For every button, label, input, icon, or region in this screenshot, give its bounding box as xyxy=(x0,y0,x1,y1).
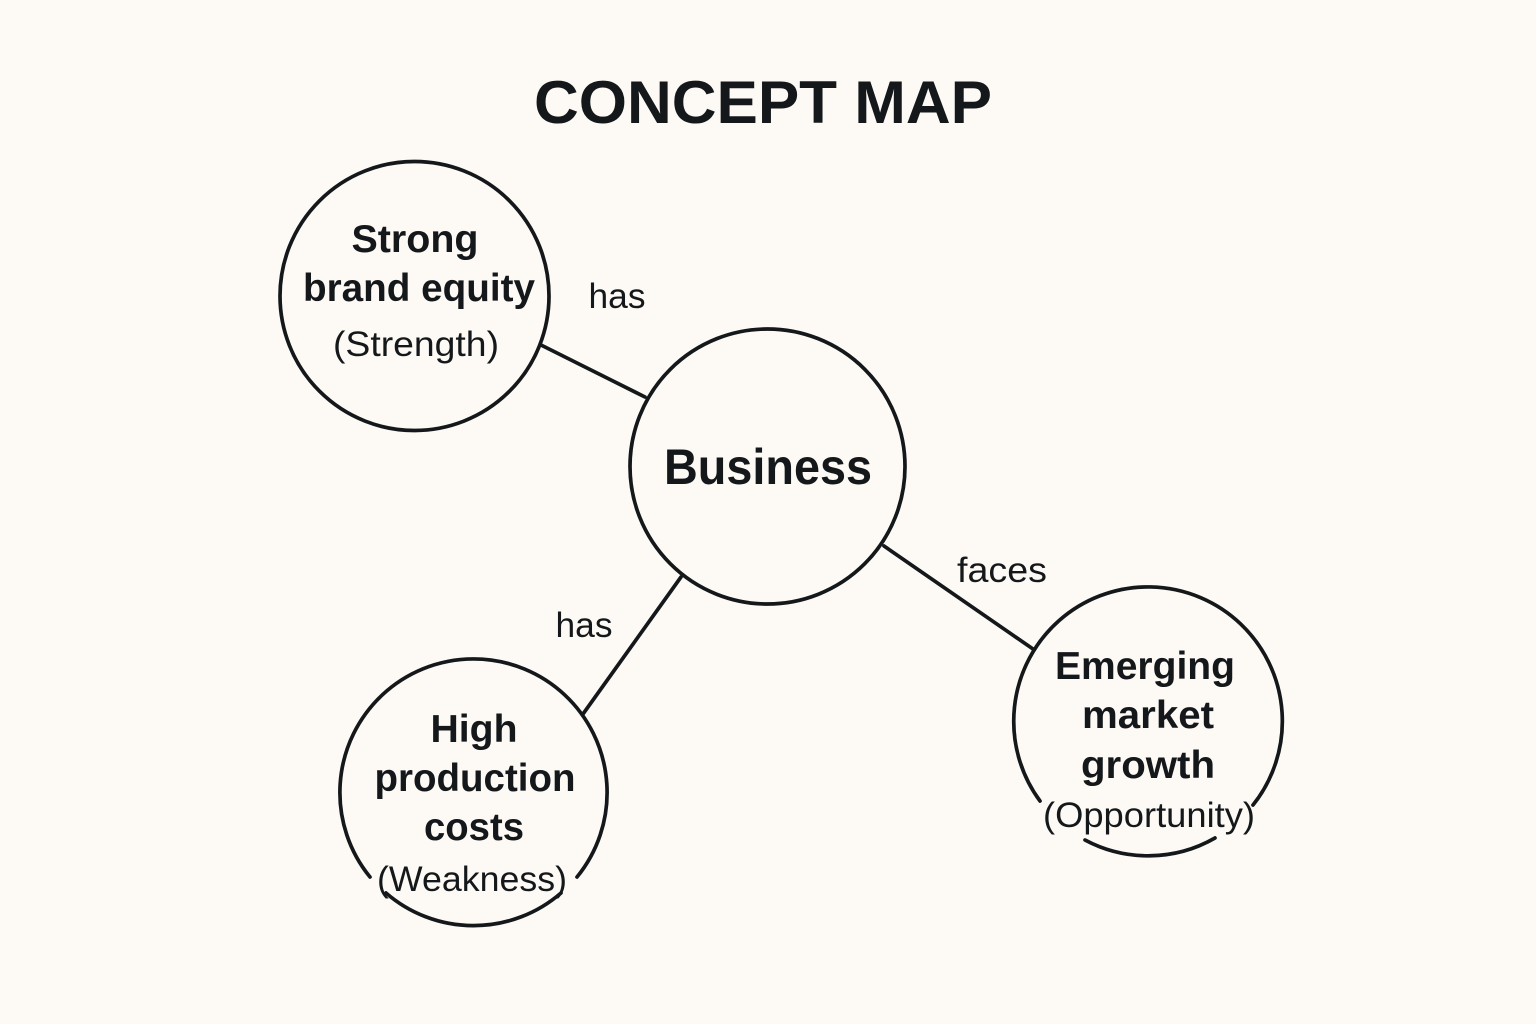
node: Emerging market growth: Emerging xyxy=(1055,645,1235,688)
node: Strong brand equity xyxy=(280,162,549,430)
connector: Business to Emerging market growth xyxy=(884,546,1033,649)
node: High production costs: (Weakness) xyxy=(377,860,567,899)
node: Emerging market growth: growth xyxy=(1081,744,1215,787)
node: High production costs: High xyxy=(430,708,518,751)
node: Emerging market growth: (Opportunity) xyxy=(1043,796,1255,835)
connector: Business to High production costs xyxy=(583,577,681,714)
node: High production costs xyxy=(340,659,607,926)
node: Strong brand equity: Strong xyxy=(352,218,478,261)
node: Strong brand equity: brand equity xyxy=(303,267,535,310)
connector label: has (weakness): has xyxy=(556,606,612,645)
node: Emerging market growth xyxy=(1014,587,1282,856)
node: Emerging market growth: market xyxy=(1082,694,1214,737)
node: High production costs: costs xyxy=(424,806,524,849)
node: Business: Business xyxy=(664,439,872,495)
node: Strong brand equity: (Strength) xyxy=(333,325,499,364)
node: High production costs: production xyxy=(374,757,576,800)
connector label: has (strength): has xyxy=(588,277,646,316)
connector label: faces: faces xyxy=(957,551,1047,590)
title: CONCEPT MAP xyxy=(534,69,992,136)
connector: Business to Strong brand equity xyxy=(541,345,645,397)
node: Business xyxy=(630,329,905,604)
